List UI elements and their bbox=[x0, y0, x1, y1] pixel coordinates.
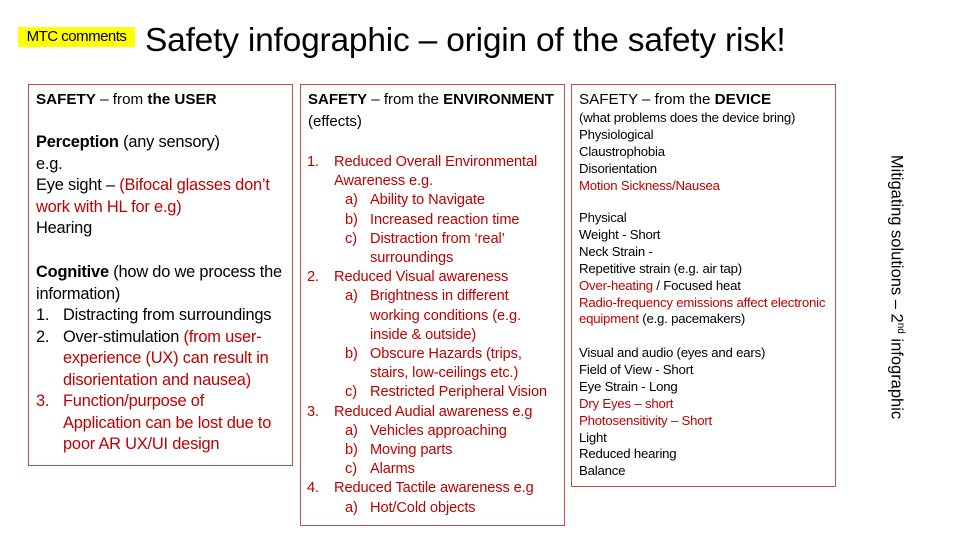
device physical: Radio-frequency emissions affect electronic equipment (e.g. pacemakers) bbox=[579, 295, 825, 326]
environment list: a) bbox=[345, 423, 358, 439]
environment list: Restricted Peripheral Vision bbox=[370, 384, 547, 400]
label: MTC comments: MTC comments bbox=[27, 28, 126, 45]
environment list: Reduced Tactile awareness e.g bbox=[334, 480, 534, 496]
environment list: Distraction from ‘real’ surroundings bbox=[370, 231, 504, 266]
device visual and audio: Eye Strain - Long bbox=[579, 379, 678, 394]
environment list: Alarms bbox=[370, 461, 415, 477]
device physiological bbox=[579, 110, 795, 193]
panel: environment bbox=[300, 84, 565, 526]
user cognitive text: 3. bbox=[36, 392, 49, 410]
device visual and audio: Photosensitivity – Short bbox=[579, 413, 712, 428]
device visual and audio: Dry Eyes – short bbox=[579, 396, 673, 411]
device physical: Weight - Short bbox=[579, 227, 660, 242]
panel: user bbox=[28, 84, 293, 466]
user cognitive text: Function/purpose of bbox=[63, 392, 204, 410]
user perception text: Perception (any sensory) bbox=[36, 133, 220, 151]
user cognitive text: Application can be lost due to bbox=[63, 414, 271, 432]
vertical label: mitigating solutions: Mitigating solutions – 2 nd infographic bbox=[888, 155, 906, 419]
user cognitive text: 1. bbox=[36, 306, 49, 324]
environment list bbox=[307, 154, 547, 516]
environment list: c) bbox=[345, 384, 357, 400]
user perception text bbox=[36, 133, 270, 237]
device visual and audio: Reduced hearing bbox=[579, 446, 676, 461]
environment list: Reduced Overall Environmental Awareness e.g. bbox=[334, 154, 537, 189]
environment list: a) bbox=[345, 288, 358, 304]
environment list: Brightness in different working conditions (e.g. inside & outside) bbox=[370, 288, 521, 343]
environment list: Vehicles approaching bbox=[370, 423, 507, 439]
device physiological: Claustrophobia bbox=[579, 144, 665, 159]
environment list: Obscure Hazards (trips, stairs, low-ceilings etc.) bbox=[370, 346, 522, 381]
device visual and audio: Light bbox=[579, 430, 607, 445]
user cognitive text: 2. bbox=[36, 328, 49, 346]
environment list: Hot/Cold objects bbox=[370, 500, 475, 516]
user cognitive text: poor AR UX/UI design bbox=[63, 435, 219, 453]
environment list: 3. bbox=[307, 404, 319, 420]
device physical: Neck Strain - bbox=[579, 244, 653, 259]
environment list: Increased reaction time bbox=[370, 212, 519, 228]
environment list: 4. bbox=[307, 480, 319, 496]
environment list: Reduced Visual awareness bbox=[334, 269, 508, 285]
environment list: Ability to Navigate bbox=[370, 192, 485, 208]
panel: device bbox=[571, 84, 836, 487]
device physical bbox=[579, 210, 826, 326]
user cognitive text: Distracting from surroundings bbox=[63, 306, 271, 324]
user cognitive text: Over-stimulation (from user-experience (UX) can result in disorientation and nausea) bbox=[63, 328, 269, 388]
user cognitive text bbox=[36, 263, 282, 453]
environment list: b) bbox=[345, 442, 358, 458]
device physiological: Disorientation bbox=[579, 161, 657, 176]
environment list: 2. bbox=[307, 269, 319, 285]
user perception text: Eye sight – (Bifocal glasses don’t work with HL for e.g) bbox=[36, 176, 270, 216]
device visual and audio bbox=[579, 345, 765, 478]
environment list: Moving parts bbox=[370, 442, 452, 458]
environment header: SAFETY – from the ENVIRONMENT (effects) bbox=[308, 91, 554, 130]
environment list: a) bbox=[345, 192, 358, 208]
environment list: a) bbox=[345, 500, 358, 516]
device physiological: Physiological bbox=[579, 127, 653, 142]
device visual and audio: Field of View - Short bbox=[579, 362, 693, 377]
environment list: b) bbox=[345, 212, 358, 228]
device physiological: (what problems does the device bring) bbox=[579, 110, 795, 125]
user header: SAFETY – from the USER bbox=[36, 91, 217, 108]
user perception text: Hearing bbox=[36, 219, 92, 237]
environment list: c) bbox=[345, 461, 357, 477]
device physiological: Motion Sickness/Nausea bbox=[579, 178, 720, 193]
environment list: Reduced Audial awareness e.g bbox=[334, 404, 532, 420]
environment list: 1. bbox=[307, 154, 319, 170]
user perception text: e.g. bbox=[36, 154, 63, 172]
device header: SAFETY – from the DEVICE bbox=[579, 91, 771, 108]
environment list: b) bbox=[345, 346, 358, 362]
device visual and audio: Visual and audio (eyes and ears) bbox=[579, 345, 765, 360]
device physical: Over-heating / Focused heat bbox=[579, 278, 741, 293]
environment list: c) bbox=[345, 231, 357, 247]
title: Safety infographic – origin of the safety risk! bbox=[145, 22, 785, 59]
device visual and audio: Balance bbox=[579, 463, 625, 478]
device physical: Repetitive strain (e.g. air tap) bbox=[579, 261, 742, 276]
user cognitive text: Cognitive (how do we process the information) bbox=[36, 263, 282, 302]
device physical: Physical bbox=[579, 210, 627, 225]
